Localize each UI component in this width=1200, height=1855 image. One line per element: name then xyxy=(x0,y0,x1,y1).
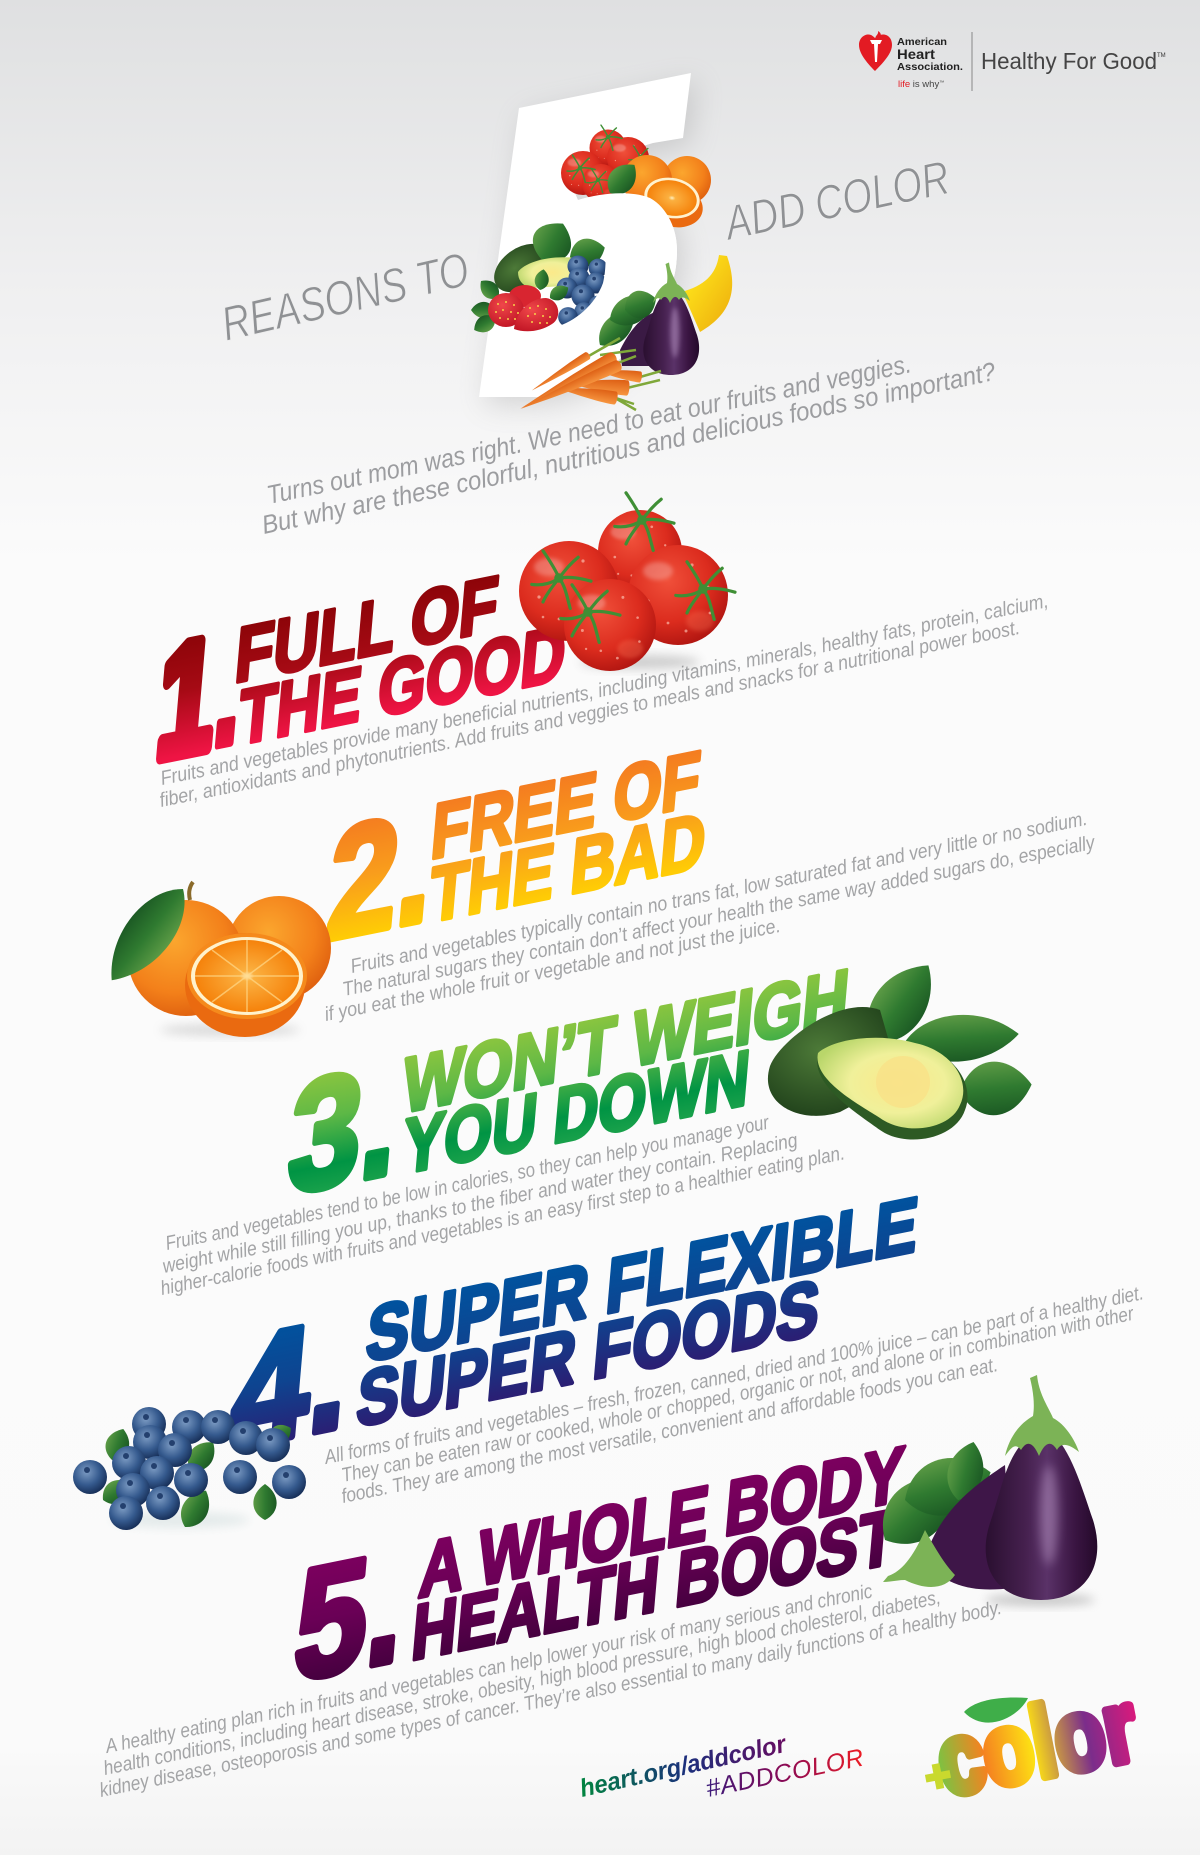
mini tomatoes xyxy=(561,125,653,202)
mini oranges xyxy=(600,155,711,232)
body text 2: Fruits and vegetables typically contain no trans fat, low saturated fat and very little or no sodium. xyxy=(349,808,1089,978)
body text 1: fiber, antioxidants and phytonutrients. Add fruits and veggies to meals and snacks for a nutritional power boost. xyxy=(158,617,1022,812)
body text 4: foods. They are among the most versatile, convenient and affordable foods you can eat. xyxy=(340,1354,1000,1508)
body text 5: health conditions, including heart disease, stroke, obesity, high blood pressure, high blood cholesterol, diabetes, xyxy=(102,1587,943,1780)
heading 3: 3. xyxy=(282,1029,406,1228)
section 3: won't weigh you down xyxy=(159,938,1034,1300)
section 4: super flexible super foods xyxy=(73,1168,1146,1533)
title word: ADD COLOR: ADD COLOR xyxy=(718,152,954,251)
icon: avocado xyxy=(768,950,1034,1140)
association name: American xyxy=(897,36,947,48)
white 5 shape xyxy=(479,73,691,397)
call to action: web address: heart.org/addcolor xyxy=(577,1730,789,1803)
heading 4: SUPER FLEXIBLE xyxy=(363,1180,922,1379)
body text 2: if you eat the whole fruit or vegetable and not just the juice. xyxy=(323,915,782,1026)
word color: color xyxy=(928,1669,1146,1818)
icon: heart and torch xyxy=(859,31,892,71)
heading 5: A WHOLE BODY xyxy=(416,1429,907,1615)
body text 3: higher-calorie foods with fruits and vegetables is an easy first step to a healthier eating plan. xyxy=(159,1142,847,1300)
heading 1: FULL OF xyxy=(232,559,502,700)
body text 3: Fruits and vegetables tend to be low in calories, so they can help you manage your xyxy=(164,1112,772,1255)
heading 4 xyxy=(225,1168,923,1483)
intro text: Turns out mom was right. We need to eat our fruits and veggies. xyxy=(264,348,914,510)
front of 5 bowl overlapping the fruit xyxy=(488,193,677,397)
mini avocado xyxy=(485,214,608,302)
heading 2: THE BAD xyxy=(427,796,709,939)
heading 3: WON’T WEIGH xyxy=(400,952,852,1130)
section 2: free of the bad xyxy=(93,720,1097,1037)
logo: American Heart Association, Healthy For Good: TM xyxy=(1157,53,1166,59)
plus sign: + xyxy=(921,1750,955,1803)
mini eggplants and leaves xyxy=(591,262,699,375)
body text 1: Fruits and vegetables provide many beneficial nutrients, including vitamins, minerals, healthy fats, protein, calcium, xyxy=(159,590,1050,790)
mini carrots xyxy=(517,338,661,414)
body text 3: weight while still filling you up, thanks to the fiber and water they contain. Replacing xyxy=(161,1130,799,1278)
logo: American Heart Association, Healthy For Good xyxy=(859,31,1166,91)
icon: tomatoes xyxy=(519,493,735,671)
heading 5 xyxy=(288,1416,909,1715)
body text 5: kidney disease, osteoporosis and some types of cancer. They’re also essential to many daily functions of a healthy body. xyxy=(98,1597,1004,1802)
heading 1: THE GOOD xyxy=(236,608,569,762)
heading 2: 2. xyxy=(321,776,441,974)
tagline: life is why: ™ xyxy=(939,80,944,86)
association name: Heart xyxy=(897,47,936,62)
heading 2: FREE OF xyxy=(428,734,704,876)
heading 5: HEALTH BOOST xyxy=(409,1492,900,1677)
association name xyxy=(897,36,963,73)
logo: +color xyxy=(912,1669,1146,1821)
icon: blueberries xyxy=(73,1407,306,1533)
heading 3: YOU DOWN xyxy=(400,1033,753,1191)
icon: eggplants xyxy=(866,1375,1097,1606)
body text 5: A healthy eating plan rich in fruits and vegetables can help lower your risk of many serious and chronic xyxy=(103,1580,874,1758)
call to action: hashtag: #ADDCOLOR xyxy=(704,1744,866,1803)
section 1: full of the good xyxy=(151,493,1050,812)
heading 1 xyxy=(151,533,576,792)
heading 3 xyxy=(282,938,854,1228)
title word: REASONS TO: REASONS TO xyxy=(217,243,474,352)
mini strawberries xyxy=(470,268,572,337)
icon: oranges xyxy=(93,875,331,1037)
icon: leaf xyxy=(964,1698,1028,1723)
section 5: a whole body health boost xyxy=(98,1375,1097,1802)
tagline: life is why: life is why xyxy=(898,79,939,90)
body text 2: The natural sugars they contain don’t affect your health the same way added sugars do, especially xyxy=(341,832,1097,1001)
heading 5: 5. xyxy=(288,1516,412,1715)
association name: Association. xyxy=(897,61,963,73)
heading 2 xyxy=(321,720,716,974)
intro text: But why are these colorful, nutritious and delicious foods so important? xyxy=(259,356,999,540)
mini banana xyxy=(681,255,732,332)
Healthy For Good: Healthy For Good xyxy=(981,48,1157,74)
heading 4: SUPER FOODS xyxy=(354,1263,823,1444)
big white numeral 5 with fruit and vegetables xyxy=(470,73,732,414)
heading 1: 1. xyxy=(151,598,251,792)
mini blueberries xyxy=(556,255,607,327)
heading 4: 4. xyxy=(225,1282,357,1483)
